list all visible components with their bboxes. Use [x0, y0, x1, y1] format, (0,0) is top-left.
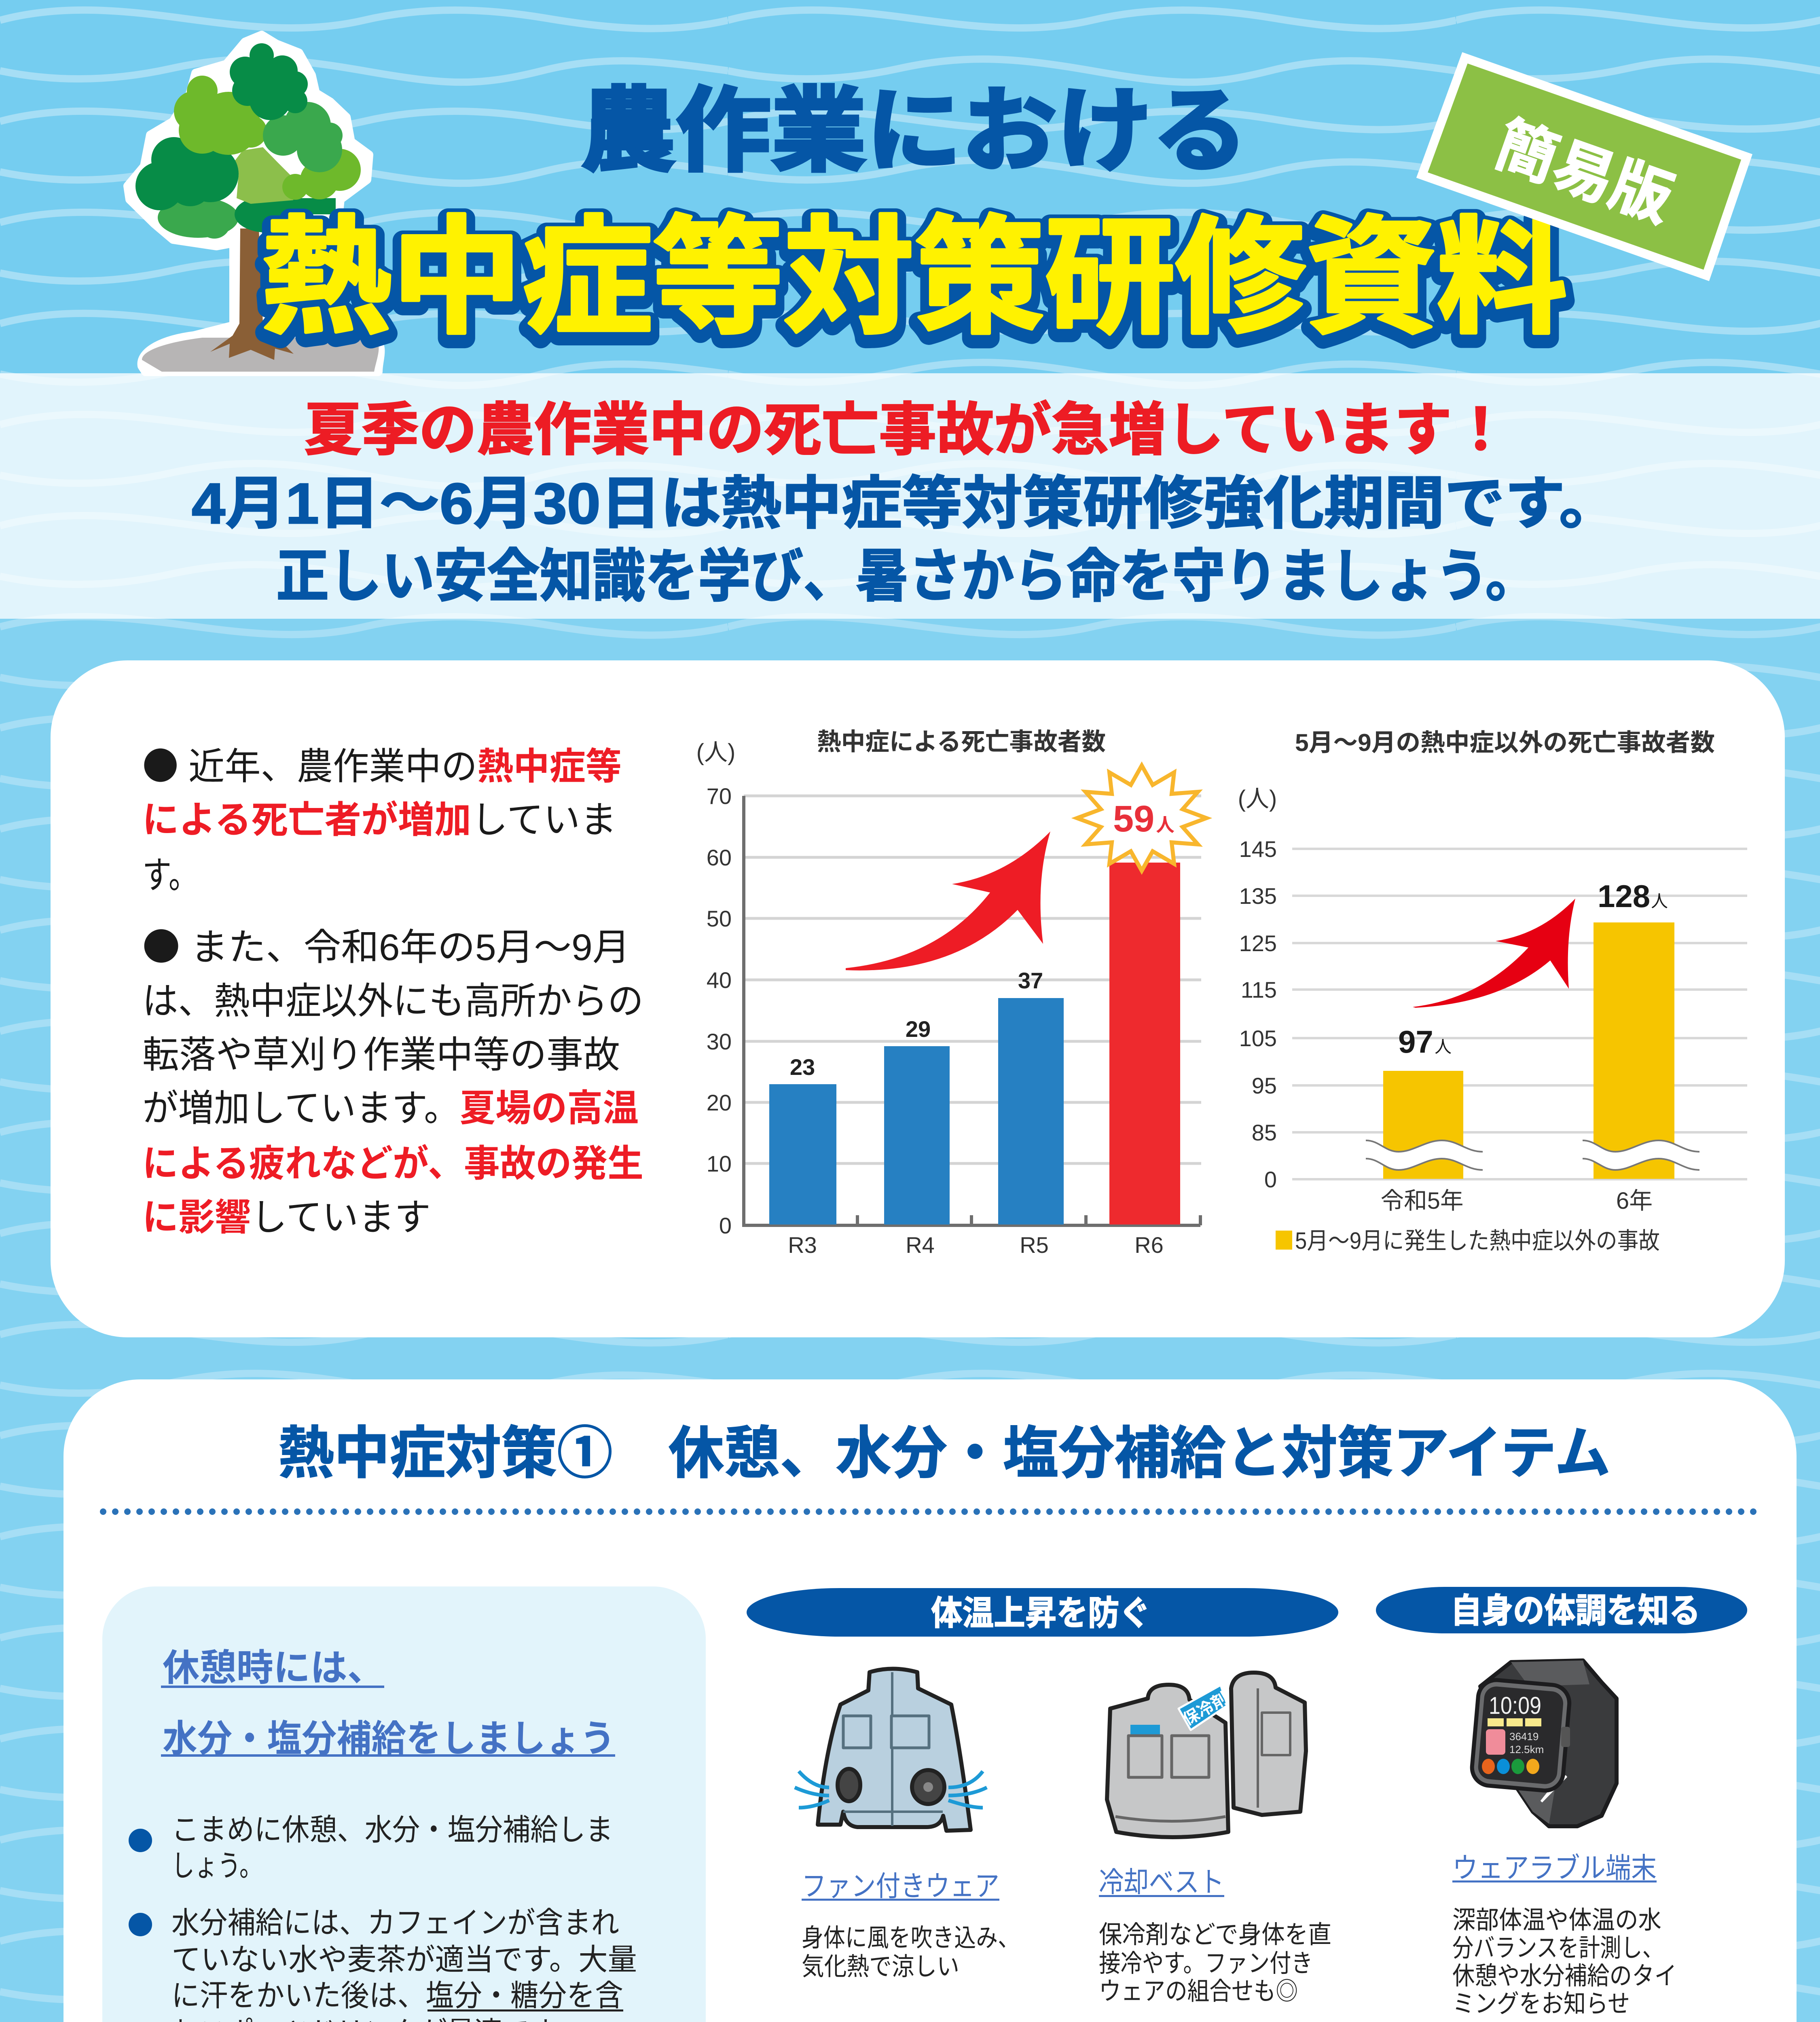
text block: statistics summary: す。: [142, 855, 198, 896]
bar chart: other deaths: 0: [1264, 1167, 1277, 1192]
label: wearable device: ウェアラブル端末: [1452, 1852, 1657, 1884]
bar chart: other deaths: 5月～9月の熱中症以外の死亡事故者数: [1295, 729, 1715, 756]
bullet list: hydration tips: しょう。: [171, 1849, 262, 1882]
bar chart: other deaths: 令和5年: [1381, 1188, 1463, 1214]
heading: rest and hydration: [161, 1648, 615, 1760]
text block: statistics summary: 転落や草刈り作業中等の事故: [142, 1034, 620, 1076]
heading: countermeasure 1: 熱中症対策① 休憩、水分・塩分補給と対策アイテム: [278, 1421, 1610, 1485]
group: know your condition: [1376, 1587, 1747, 2018]
label: wearable device: 深部体温や体温の水: [1452, 1906, 1661, 1934]
bar chart: heatstroke deaths: R4: [906, 1232, 935, 1258]
text block: statistics summary: は、熱中症以外にも高所からの: [142, 981, 643, 1022]
bar chart: heatstroke deaths: [696, 728, 1206, 1258]
panel: statistics: [51, 660, 1785, 1337]
bar chart: heatstroke deaths: R5: [1020, 1232, 1049, 1258]
text block: statistics summary: が増加しています。夏場の高温: [142, 1088, 639, 1129]
bar chart: heatstroke deaths: 40: [707, 967, 732, 993]
label: wearable device: ミングをお知らせ: [1452, 1990, 1630, 2018]
label: fan jacket: ファン付きウェア: [802, 1870, 999, 1902]
text block: statistics summary: に影響しています: [142, 1197, 431, 1238]
label: cooling vest: 接冷やす。ファン付き: [1099, 1950, 1313, 1978]
bar chart: heatstroke deaths: R3: [788, 1232, 817, 1258]
bar chart: other deaths: [1238, 729, 1747, 1254]
text block: statistics summary: ● また、令和6年の5月～9月: [142, 917, 630, 971]
bar chart: heatstroke deaths: 60: [707, 845, 732, 870]
announcement band background: [0, 373, 1820, 619]
label: wearable device: 休憩や水分補給のタイ: [1452, 1962, 1677, 1990]
alert text: 正しい安全知識を学び、暑さから命を守りましょう。: [276, 544, 1538, 609]
heading: rest and hydration: 休憩時には、: [163, 1648, 384, 1689]
bar chart: heatstroke deaths: 30: [707, 1029, 732, 1054]
icon: smartwatch: 36419: [1509, 1730, 1539, 1743]
icon: fan jacket: [795, 1669, 987, 1831]
bar chart: other deaths: 85: [1252, 1120, 1277, 1145]
bar chart: other deaths: 128: [1598, 878, 1650, 914]
bar chart: heatstroke deaths: 熱中症による死亡事故者数: [817, 728, 1106, 755]
bar chart: heatstroke deaths: (人): [696, 739, 735, 766]
callout: 59 people: 59: [1113, 798, 1154, 840]
pill heading: know your condition: [1376, 1587, 1747, 1633]
text block: statistics summary: ● 近年、農作業中の熱中症等: [142, 736, 622, 790]
bullet list: hydration tips: ていない水や麦茶が適当です。大量: [171, 1943, 637, 1976]
bar chart: other deaths: 97: [1398, 1024, 1433, 1060]
callout: 59 people: [1077, 766, 1206, 871]
arrow: rising deaths: [846, 831, 1050, 971]
pill heading: know your condition: 自身の体調を知る: [1451, 1592, 1700, 1630]
bullet list: hydration tips: [129, 1813, 641, 2022]
label: cooling vest: ウェアの組合せも◎: [1099, 1978, 1298, 2005]
panel: rest and hydration: [102, 1586, 706, 2022]
bar chart: heatstroke deaths: 50: [707, 906, 732, 931]
label: cooling vest: [1099, 1866, 1331, 2005]
bar chart: other deaths: 6年: [1616, 1188, 1653, 1214]
text block: statistics summary: による疲れなどが、事故の発生: [142, 1143, 643, 1184]
heading: rest and hydration: 水分・塩分補給をしましょう: [163, 1718, 615, 1760]
bar chart: other deaths: 95: [1252, 1073, 1277, 1098]
label: fan jacket: 身体に風を吹き込み、: [802, 1924, 1020, 1952]
label: cooling vest: 冷却ベスト: [1099, 1866, 1224, 1898]
alert text: [192, 398, 1619, 609]
alert text: 4月1日～6月30日は熱中症等対策研修強化期間です。: [192, 472, 1619, 536]
icon: smartwatch: 10:09: [1489, 1692, 1541, 1719]
bar chart: heatstroke deaths: 10: [707, 1151, 732, 1176]
bar chart: heatstroke deaths: 29: [906, 1016, 931, 1042]
label: wearable device: [1452, 1852, 1677, 2018]
pill heading: prevent temperature rise: 体温上昇を防ぐ: [931, 1594, 1151, 1632]
bullet list: hydration tips: に汗をかいた後は、塩分・糖分を含: [171, 1979, 623, 2012]
bar chart: other deaths: 125: [1239, 931, 1277, 956]
bar chart: heatstroke deaths: R6: [1134, 1232, 1164, 1258]
label: cooling vest: 保冷剤などで身体を直: [1099, 1921, 1331, 1949]
bar chart: heatstroke deaths: 70: [707, 783, 732, 809]
text block: statistics summary: [142, 736, 643, 1238]
arrow: rising other deaths: [1413, 899, 1575, 1008]
badge: simplified version: [1422, 58, 1747, 275]
bar chart: heatstroke deaths: 20: [707, 1090, 732, 1115]
title: main: 熱中症等対策研修資料: [261, 212, 1567, 354]
icon: tree: [128, 35, 380, 372]
panel: countermeasures: [63, 1379, 1797, 2022]
group: prevent body temperature rise: [747, 1588, 1338, 2005]
label: wearable device: 分バランスを計測し、: [1452, 1934, 1663, 1962]
badge: simplified version: 簡易版: [1487, 110, 1681, 235]
icon: cooling vest: [1107, 1673, 1306, 1837]
bar chart: other deaths: 105: [1239, 1026, 1277, 1051]
alert text: 夏季の農作業中の死亡事故が急増しています！: [304, 398, 1509, 462]
icon: smartwatch: 12.5km: [1509, 1743, 1544, 1756]
bar chart: other deaths: 人: [1435, 1037, 1452, 1056]
bar chart: other deaths: 人: [1651, 892, 1668, 911]
bar chart: other deaths: 135: [1239, 883, 1277, 909]
label: fan jacket: 気化熱で涼しい: [802, 1953, 959, 1981]
icon: smartwatch: [1471, 1660, 1617, 1826]
title: top line: 農作業における: [580, 80, 1248, 183]
bar chart: heatstroke deaths: 37: [1018, 968, 1043, 993]
bullet list: hydration tips: 水分補給には、カフェインが含まれ: [171, 1906, 619, 1940]
bullet list: hydration tips: こまめに休憩、水分・塩分補給しま: [171, 1813, 613, 1846]
bar chart: other deaths: (人): [1238, 786, 1277, 812]
bar chart: heatstroke deaths: 23: [790, 1054, 815, 1080]
pill heading: prevent temperature rise: [747, 1588, 1338, 1637]
title: main: 熱中症等対策研修資料: [261, 207, 1567, 349]
callout: 59 people: 人: [1156, 814, 1175, 835]
bar chart: other deaths: 145: [1239, 836, 1277, 862]
bar chart: heatstroke deaths: 0: [719, 1213, 732, 1238]
label: fan jacket: [802, 1870, 1020, 1981]
bar chart: other deaths: 115: [1241, 977, 1277, 1003]
text block: statistics summary: による死亡者が増加していま: [142, 799, 617, 841]
icon: cooling vest: 保冷剤: [1180, 1689, 1231, 1729]
legend: 5月～9月に発生した熱中症以外の事故: [1295, 1228, 1660, 1254]
